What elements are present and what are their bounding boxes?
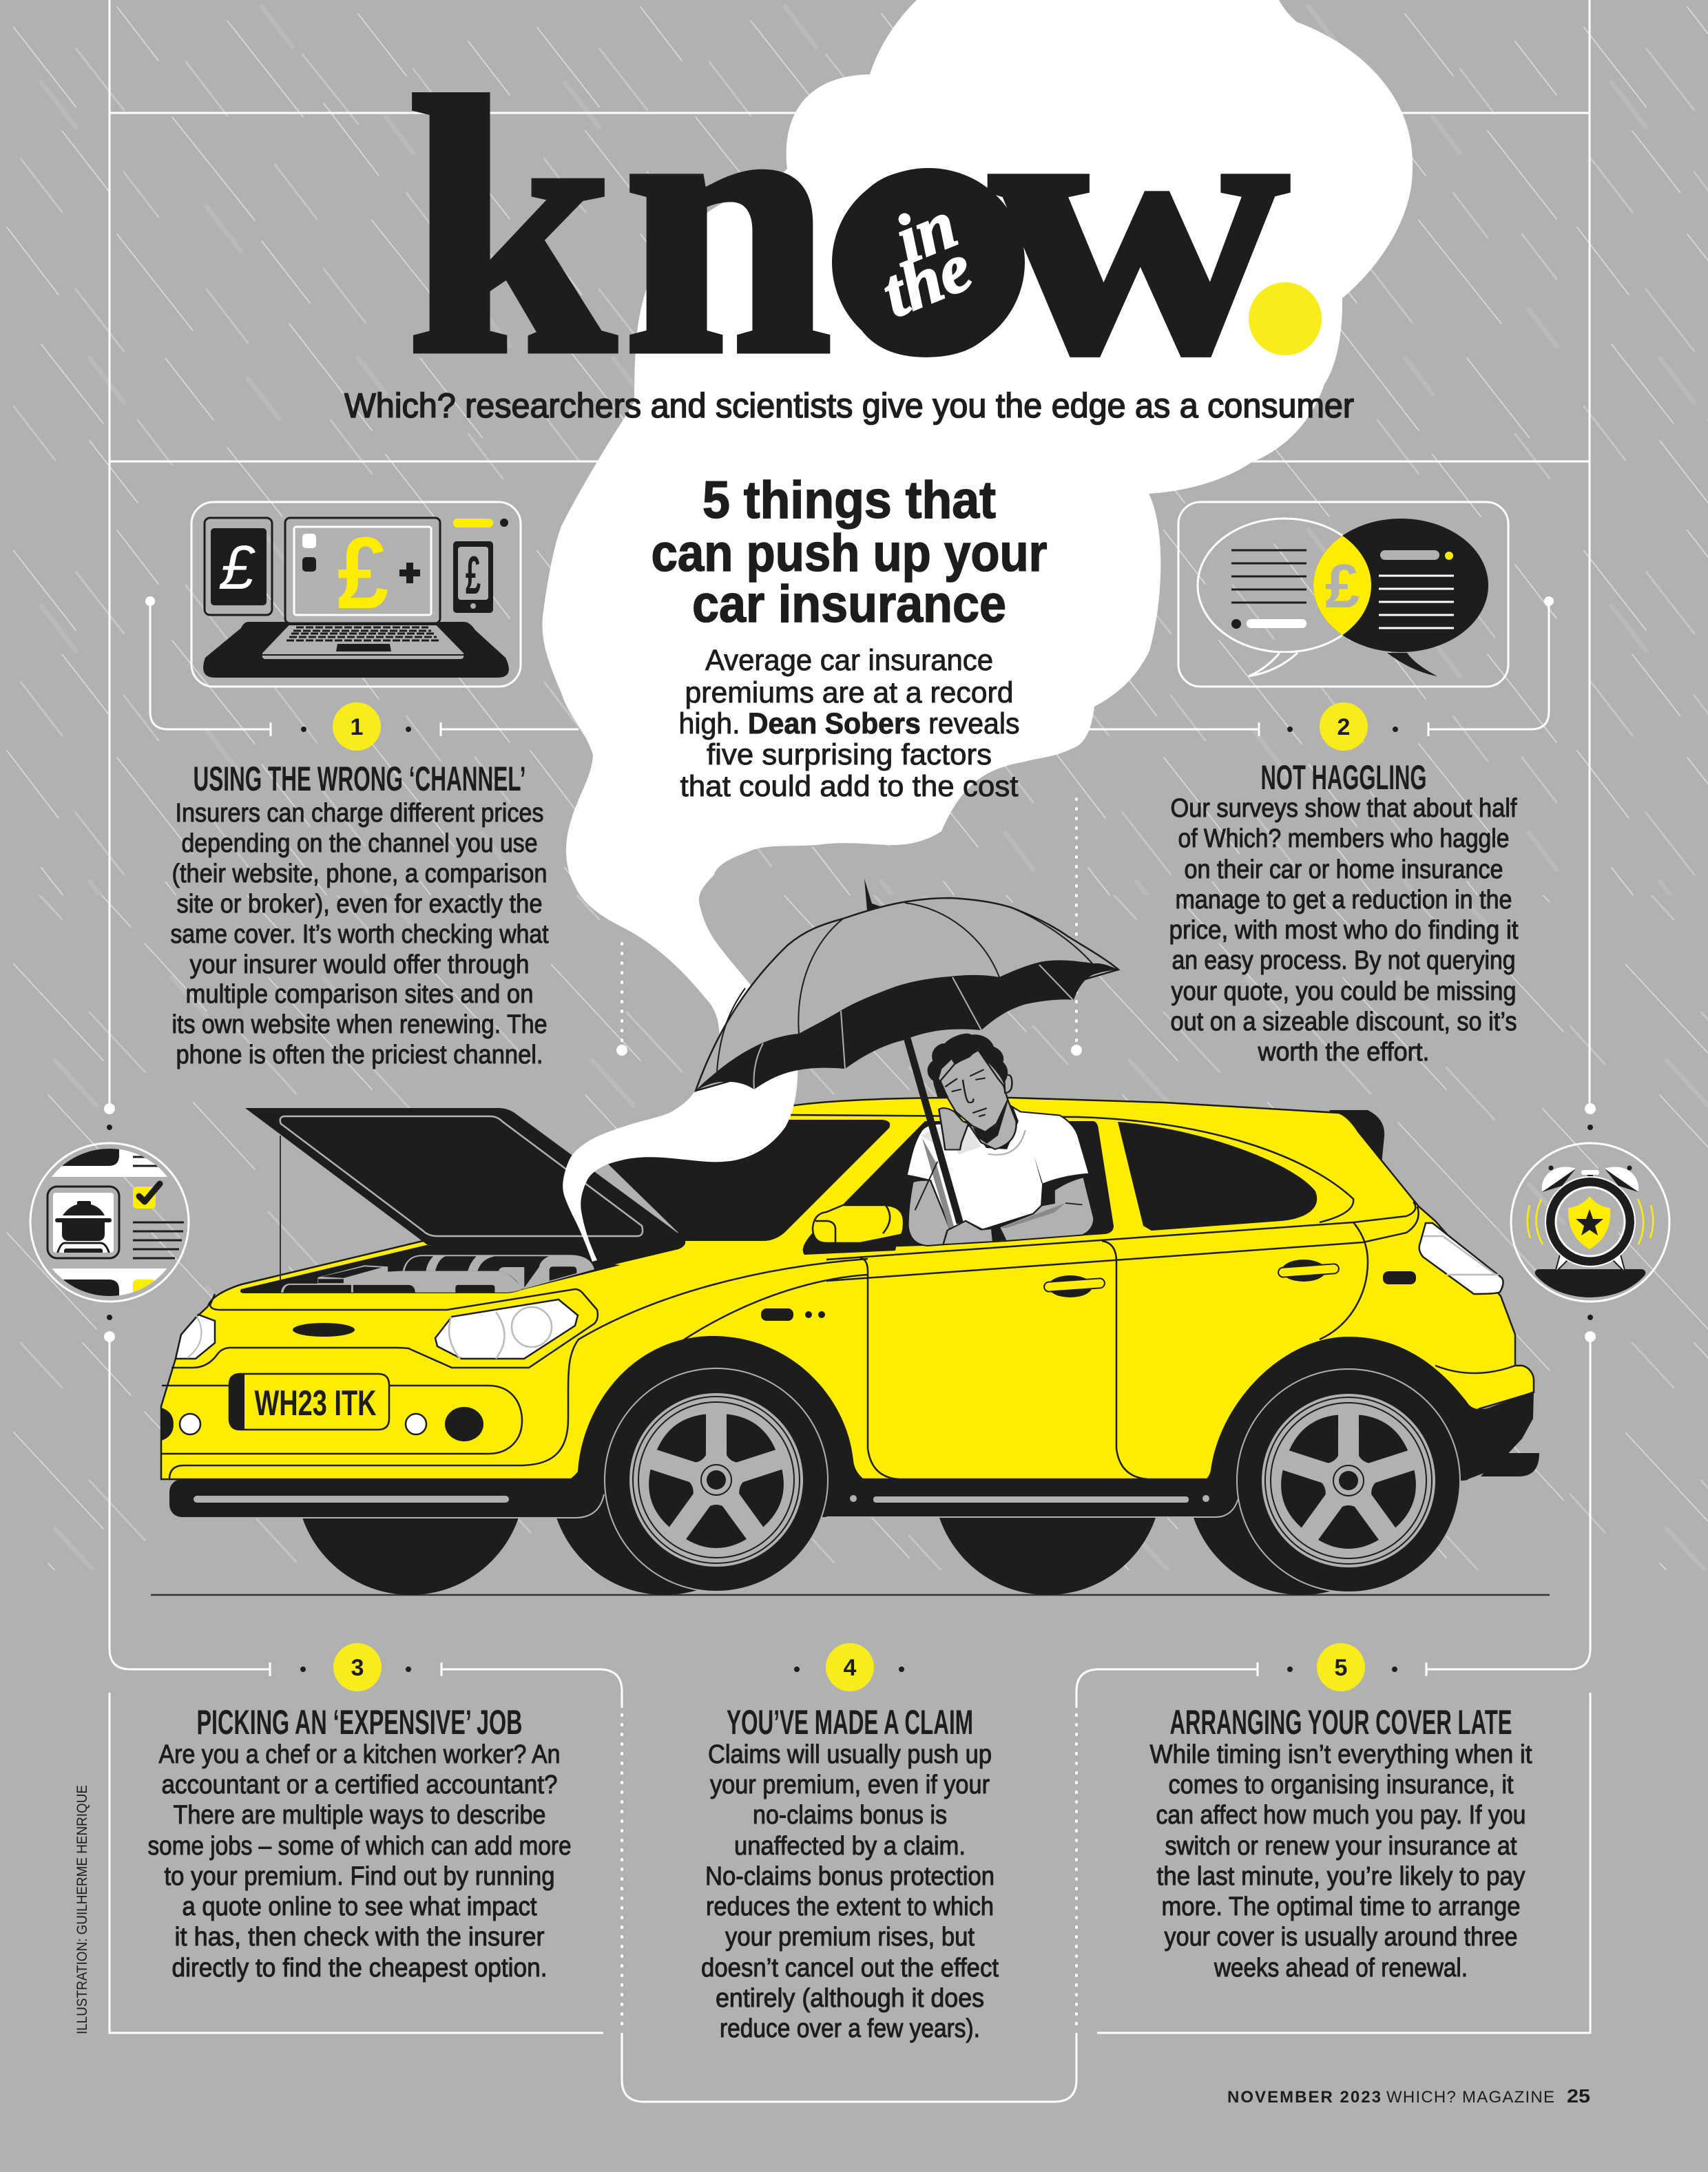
text block 4 [701, 1703, 999, 2043]
text block 5: the last minute, you’re likely to pay [1157, 1862, 1525, 1891]
clock body [1545, 1177, 1635, 1266]
text block 5: comes to organising insurance, it [1168, 1771, 1514, 1799]
text block 2: out on a sizeable discount, so it’s [1171, 1007, 1517, 1036]
engine [281, 1255, 594, 1293]
icon: yellow overlap with pound sign [1313, 536, 1371, 635]
text block 1: its own website when renewing. The [172, 1010, 547, 1039]
rear spoiler and exhaust [1329, 1110, 1539, 1476]
central heading: car insurance [692, 575, 1006, 634]
sound waves [1528, 1199, 1653, 1244]
letter o disc [832, 168, 1025, 357]
central heading: can push up your [652, 524, 1047, 583]
in the lettering: the [871, 228, 981, 332]
clock feet [1555, 1255, 1625, 1273]
badge 1 [333, 702, 381, 751]
clock bells [1542, 1165, 1638, 1192]
title word: know: n [623, 15, 832, 431]
badge 4: 4 [844, 1655, 857, 1681]
text block 2: worth the effort. [1258, 1038, 1430, 1067]
central intro text [679, 644, 1019, 803]
text block 3: to your premium. Find out by running [164, 1862, 555, 1891]
shield with star [1568, 1196, 1610, 1249]
icon: left outlined speech bubble [1198, 519, 1371, 676]
text block 4: No-claims bonus protection [705, 1862, 994, 1891]
number plate and bumper: WH23 ITK [255, 1383, 377, 1423]
side markers [761, 1271, 1416, 1321]
text block 1: depending on the channel you use [182, 829, 537, 858]
text block 1: site or broker), even for exactly the [176, 890, 543, 919]
text block 1 [171, 760, 549, 1069]
text block 5: can affect how much you pay. If you [1156, 1801, 1526, 1830]
man: head and neck [928, 1034, 1017, 1149]
badge 2 [1320, 702, 1368, 751]
text block 1: Insurers can charge different prices [175, 799, 544, 828]
text block 3 [147, 1703, 572, 1983]
umbrella spike [864, 879, 880, 910]
text block 2: an easy process. By not querying [1172, 946, 1515, 975]
text block 3: accountant or a certified accountant? [161, 1771, 558, 1799]
text block 2 [1169, 758, 1519, 1067]
title [406, 15, 1322, 431]
text block 1: (their website, phone, a comparison [172, 859, 547, 888]
man: raised hand [939, 1108, 968, 1150]
door mirror [803, 1205, 904, 1255]
front headlamp surround [171, 1289, 598, 1368]
badge 5 [1317, 1643, 1365, 1691]
car body [161, 1098, 1534, 1479]
central intro text: Average car insurance [705, 644, 993, 677]
title word: know: k [406, 24, 618, 430]
smoke cloud [542, 0, 1413, 1047]
icon: left phone [205, 518, 272, 615]
icon: right phone: £ [466, 545, 481, 605]
in the lettering: in [885, 185, 967, 278]
sill and arches [169, 1336, 1534, 1518]
footer: 25 [1567, 2085, 1590, 2107]
windscreen [592, 1120, 890, 1257]
panel: icon 1 channels [191, 502, 521, 687]
text block 5: switch or renew your insurance at [1165, 1832, 1517, 1861]
man: left arm [908, 1180, 952, 1246]
text block 1: same cover. It’s worth checking what [171, 920, 549, 949]
engine bay [240, 1245, 621, 1293]
car illustration [151, 1098, 1550, 1595]
icon: laptop keyboard [262, 625, 464, 660]
icon: laptop screen [285, 516, 440, 630]
icon: laptop screen: £ [337, 516, 388, 630]
text block 3: a quote online to see what impact [182, 1892, 537, 1921]
text block 5 [1150, 1703, 1532, 1983]
text block 4: entirely (although it does [716, 1984, 984, 2013]
text block 4: no-claims bonus is [753, 1801, 947, 1830]
text block 5: more. The optimal time to arrange [1161, 1892, 1521, 1921]
pot tile [48, 1187, 119, 1258]
badge 2: 2 [1337, 714, 1350, 740]
footer: WHICH? MAGAZINE [1386, 2088, 1554, 2107]
title word: know [406, 15, 1289, 431]
badge 4 [826, 1643, 874, 1691]
panel: icon 2 haggling [1178, 502, 1508, 687]
icon: job circle with cooking pot [28, 1143, 193, 1302]
umbrella [696, 879, 1118, 1091]
text block 3: Are you a chef or a kitchen worker? An [158, 1740, 561, 1769]
man in car window [906, 1034, 1094, 1246]
text block 4: unaffected by a claim. [734, 1832, 966, 1861]
text block 2: your quote, you could be missing [1171, 977, 1517, 1006]
text block 2: price, with most who do finding it [1169, 916, 1519, 945]
text block 5: weeks ahead of renewal. [1214, 1954, 1468, 1983]
man: hands and watch [943, 1221, 1006, 1244]
connectors and number badges top row [145, 596, 1554, 751]
central intro text: high. Dean Sobers reveals [679, 707, 1019, 740]
text block 5: While timing isn’t everything when it [1150, 1740, 1532, 1769]
text block 5: ARRANGING YOUR COVER LATE [1169, 1703, 1512, 1742]
icon: right phone [453, 519, 508, 613]
ground line [151, 1594, 1550, 1596]
footer [1227, 2085, 1590, 2107]
central heading [652, 471, 1047, 634]
man: right arm [997, 1177, 1094, 1241]
central intro text: premiums are at a record [685, 676, 1014, 709]
central intro text: five surprising factors [707, 738, 992, 771]
text block 4: Claims will usually push up [708, 1740, 992, 1769]
subtitle: Which? researchers and scientists give you the edge as a consumer [344, 386, 1354, 425]
text block 1: your insurer would offer through [190, 950, 529, 979]
man: shirt [906, 1107, 1090, 1230]
far and depth wheels [296, 1366, 1416, 1595]
checkbox [133, 1184, 160, 1209]
icon: yellow overlap with pound sign: £ [1325, 552, 1360, 621]
yellow full stop [1249, 282, 1322, 355]
text block 4: reduce over a few years). [720, 2014, 980, 2043]
badge 3 [333, 1643, 382, 1691]
icon: alarm clock circle [1511, 1143, 1669, 1302]
umbrella underside [696, 960, 1118, 1091]
smoke wisp from engine [563, 1061, 798, 1262]
text block 3: some jobs – some of which can add more [147, 1832, 572, 1861]
headlights [176, 1299, 578, 1359]
icon: laptop base [203, 622, 509, 678]
front grille badge and lights [161, 1323, 483, 1441]
side windows [802, 1121, 1317, 1250]
text block 1: phone is often the priciest channel. [176, 1041, 543, 1069]
text block 4: reduces the extent to which [706, 1892, 994, 1921]
text block 1: multiple comparison sites and on [186, 980, 533, 1009]
title word: know: w [990, 15, 1289, 431]
text block 2: NOT HAGGLING [1260, 758, 1427, 797]
icon: left phone: £ [219, 534, 256, 603]
door handles [1044, 1260, 1339, 1297]
text block 2: manage to get a reduction in the [1175, 886, 1512, 915]
text block 4: doesn’t cancel out the effect [701, 1954, 999, 1983]
umbrella shaft [907, 1038, 960, 1223]
text block 2: Our surveys show that about half [1171, 794, 1517, 823]
open bonnet [245, 1108, 685, 1281]
footer: NOVEMBER 2023 [1227, 2088, 1381, 2107]
umbrella canopy [696, 898, 1118, 1091]
connectors and number badges bottom row [300, 1643, 1397, 1691]
text block 4: your premium rises, but [725, 1923, 975, 1952]
umbrella gray seams [754, 965, 1073, 1089]
badge 3: 3 [351, 1655, 364, 1681]
badge 1: 1 [351, 714, 363, 740]
text block 2: of Which? members who haggle [1178, 824, 1510, 853]
text block 3: PICKING AN ‘EXPENSIVE’ JOB [197, 1703, 522, 1742]
clock base [1535, 1269, 1645, 1297]
text block 5: your cover is usually around three [1164, 1923, 1518, 1952]
text block 1: USING THE WRONG ‘CHANNEL’ [193, 760, 526, 798]
badge 5: 5 [1335, 1655, 1347, 1681]
car panel lines [169, 1115, 1515, 1479]
illustration credit: ILLUSTRATION: GUILHERME HENRIQUE [74, 1785, 90, 2034]
text block 3: it has, then check with the insurer [175, 1923, 545, 1952]
text block 4: YOU’VE MADE A CLAIM [727, 1703, 973, 1742]
text block 4: your premium, even if your [710, 1771, 990, 1799]
title word: know: o [833, 15, 1021, 431]
number plate and bumper [161, 1374, 522, 1454]
central heading: 5 things that [702, 471, 996, 530]
text block 3: directly to find the cheapest option. [172, 1954, 547, 1983]
text block 2: on their car or home insurance [1185, 855, 1503, 884]
central intro text: that could add to the cost [680, 770, 1019, 803]
tail light [1419, 1223, 1503, 1294]
icon: right black speech bubble [1313, 519, 1488, 676]
wheels [605, 1368, 828, 1591]
umbrella ribs [717, 903, 1092, 1072]
text block 3: There are multiple ways to describe [174, 1801, 545, 1830]
